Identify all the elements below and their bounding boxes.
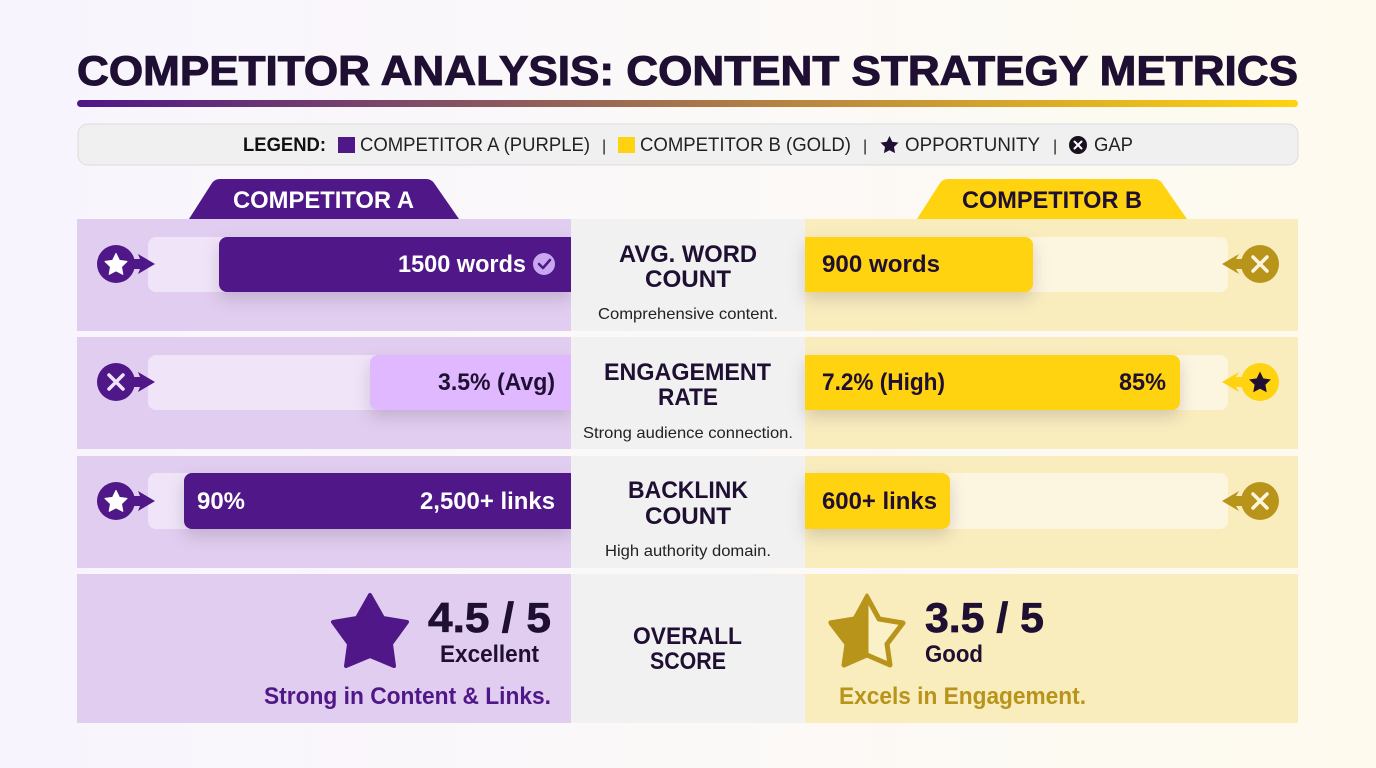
panel: backlinks competitor A: 90% [197, 488, 245, 515]
title underline [77, 100, 1298, 107]
header tab: competitor B: COMPETITOR B [962, 187, 1142, 214]
legend: LEGEND: [243, 135, 326, 156]
panel: backlinks competitor A [77, 456, 571, 568]
panel: engagement competitor B [805, 337, 1298, 449]
panel: backlinks metric: COUNT [645, 503, 731, 530]
panel: word count metric [571, 219, 805, 331]
panel: backlinks competitor B: 600+ links [822, 488, 937, 515]
title: COMPETITOR ANALYSIS: CONTENT STRATEGY METRICS [77, 47, 1298, 94]
panel: engagement metric: ENGAGEMENT [604, 359, 771, 386]
panel: word count metric: Comprehensive content. [598, 306, 778, 323]
panel: word count competitor B [805, 219, 1298, 331]
row: average word count [77, 219, 1298, 331]
panel: backlinks metric: BACKLINK [628, 477, 749, 504]
panel: score competitor B: Good [925, 641, 983, 668]
legend [78, 124, 1298, 165]
panel: engagement competitor B: 7.2% (High) [822, 369, 945, 396]
header tab: competitor B [917, 179, 1187, 219]
panel: word count competitor A: 1500 words [398, 251, 526, 278]
panel: engagement competitor B: 85% [1119, 369, 1166, 396]
panel: overall score label: OVERALL [633, 623, 742, 650]
legend: COMPETITOR A (PURPLE) [360, 135, 590, 156]
row: backlink count [77, 456, 1298, 568]
panel: engagement competitor A: 3.5% (Avg) [438, 369, 555, 396]
panel: backlinks metric [571, 456, 805, 568]
panel: score competitor A [77, 574, 571, 723]
panel: word count metric: COUNT [645, 266, 731, 293]
panel: score competitor B [805, 574, 1298, 723]
legend: | [1053, 138, 1057, 155]
panel: engagement metric [571, 337, 805, 449]
panel: score competitor B: 3.5 / 5 [925, 594, 1044, 641]
legend: OPPORTUNITY [905, 135, 1040, 156]
panel: engagement metric: Strong audience connection. [583, 425, 793, 442]
panel: engagement competitor A [77, 337, 571, 449]
row: overall score [77, 574, 1298, 723]
header tab: competitor A: COMPETITOR A [233, 187, 414, 214]
panel: overall score label [571, 574, 805, 723]
panel: word count competitor A [77, 219, 571, 331]
legend: | [602, 138, 606, 155]
legend: COMPETITOR B (GOLD) [640, 135, 851, 156]
panel: overall score label: SCORE [650, 648, 726, 675]
panel: word count metric: AVG. WORD [619, 241, 757, 268]
header tab: competitor A [189, 179, 459, 219]
panel: score competitor A: Strong in Content & Links. [264, 683, 551, 710]
panel: backlinks metric: High authority domain. [605, 543, 771, 560]
panel: word count competitor B: 900 words [822, 251, 940, 278]
panel: score competitor B: Excels in Engagement. [839, 683, 1086, 710]
panel: backlinks competitor B [805, 456, 1298, 568]
panel: backlinks competitor A: 2,500+ links [420, 488, 555, 515]
legend: | [863, 138, 867, 155]
row: engagement rate [77, 337, 1298, 449]
panel: score competitor A: 4.5 / 5 [428, 594, 551, 641]
panel: score competitor A: Excellent [440, 641, 539, 668]
legend: GAP [1094, 135, 1133, 156]
panel: engagement metric: RATE [658, 384, 718, 411]
